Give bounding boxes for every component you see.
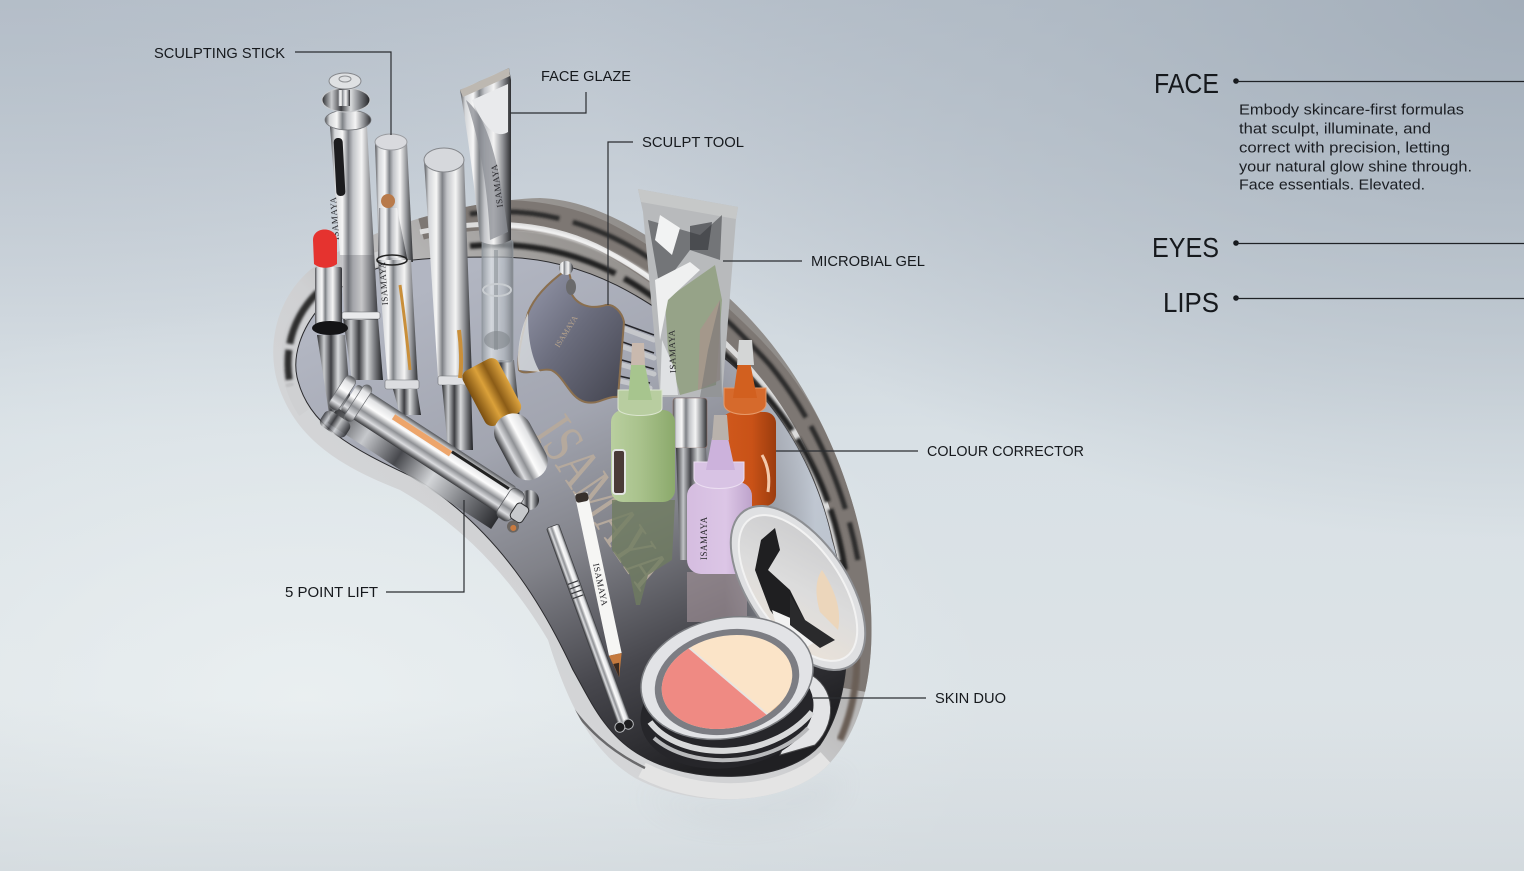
green bottle [611,343,675,502]
brand on purple bottle: ISAMAYA [699,516,709,560]
heading: eyes: EYES [1152,232,1219,263]
engraved brand on tray: ISAMAYA [522,404,684,600]
heading: lips: LIPS [1163,287,1219,318]
brand on face glaze: ISAMAYA [489,163,505,208]
label: skin duo: SKIN DUO [935,690,1006,707]
label: sculpt tool: SCULPT TOOL [642,134,744,151]
microbial gel tube [638,189,738,560]
eyes rule with dot [1233,240,1524,246]
label: 5 point lift: 5 POINT LIFT [285,584,378,601]
green bottle reflection [612,500,675,605]
face description: Face essentials. Elevated. [1239,176,1425,194]
heading: face: FACE [1154,68,1219,99]
kidney mirror tray [273,198,872,799]
gold brush [460,355,555,510]
brand on sculpting stick: ISAMAYA [328,196,341,241]
callout lines [295,52,926,698]
brand on stick: ISAMAYA [377,261,390,306]
tray shadow [640,770,845,817]
sculpting stick [322,73,383,380]
purple bottle [687,415,752,574]
brand on gel tube: ISAMAYA [666,329,678,373]
face rule with dot [1233,78,1524,84]
label: microbial gel: MICROBIAL GEL [811,253,925,270]
face description: correct with precision, letting [1239,140,1450,156]
silver pencil [543,523,635,734]
tray mirror surface [296,257,847,776]
compact lid [704,483,892,693]
white pencil [575,492,626,678]
pink and cream pans [662,635,792,729]
5 point lift [316,372,540,547]
label: sculpting stick: SCULPTING STICK [154,45,285,62]
white pencil: ISAMAYA [591,562,610,607]
label: colour corrector: COLOUR CORRECTOR [927,443,1084,460]
tall silver stick [424,148,473,450]
orange bottle [722,340,776,506]
face description: Embody skincare-first formulas [1239,102,1464,118]
face description: that sculpt, illuminate, and [1239,120,1431,138]
purple bottle reflection [687,572,747,622]
face description [1239,102,1472,194]
lips rule with dot [1233,295,1524,301]
stick with tan tip [375,134,421,415]
tray rim [273,198,872,799]
face description: your natural glow shine through. [1239,158,1472,176]
lipstick [312,230,352,420]
sculpt tool [518,261,654,403]
label: face glaze: FACE GLAZE [541,68,631,85]
face glaze tube [460,68,520,420]
compact base [640,616,831,762]
rim reflections [288,212,859,791]
brand on tool: ISAMAYA [553,314,580,349]
